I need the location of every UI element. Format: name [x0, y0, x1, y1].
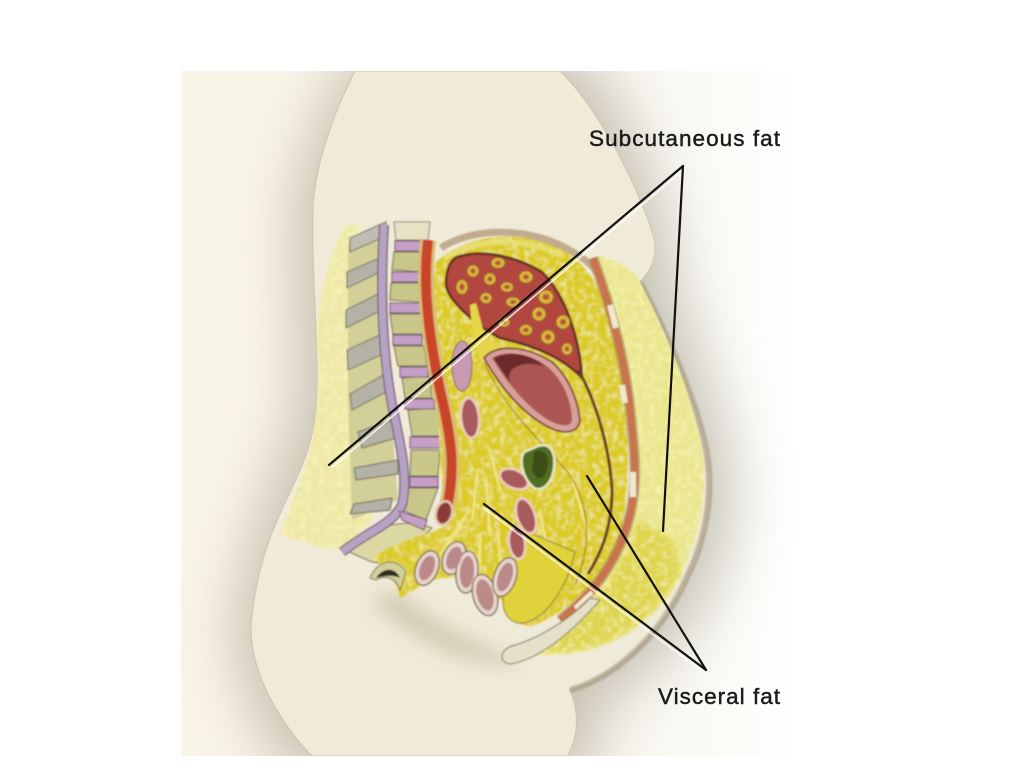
mesenteric vessels	[459, 397, 540, 560]
lower visceral lobe	[503, 530, 575, 623]
subcutaneous fat: front	[515, 255, 704, 655]
aorta	[426, 240, 455, 527]
label: subcutaneous fat: Subcutaneous fat	[589, 126, 781, 151]
subcutaneous fat: back	[280, 225, 372, 550]
spinal cord	[342, 225, 404, 552]
leader lines: subcutaneous fat	[329, 166, 684, 531]
intestine loops	[410, 538, 522, 618]
spinous processes	[346, 222, 398, 520]
abdominal wall muscle	[560, 258, 635, 620]
pancreas	[452, 341, 472, 391]
body silhouette	[251, 71, 711, 756]
rectum	[370, 562, 406, 590]
infographic: abdomen cross-section	[181, 71, 780, 756]
liver vessels	[456, 258, 572, 355]
anatomy cross-section	[280, 222, 704, 664]
mesentery strands	[440, 450, 590, 580]
peritoneal arch	[441, 232, 600, 275]
background wash	[181, 71, 770, 756]
peritoneum line	[484, 362, 612, 585]
fat strand at liver	[470, 303, 505, 360]
leader lines: visceral fat	[483, 476, 706, 674]
colon	[522, 445, 554, 489]
liver	[446, 254, 582, 378]
visceral fat	[372, 236, 628, 626]
label: visceral fat: Visceral fat	[658, 684, 781, 709]
stomach	[484, 348, 580, 432]
intervertebral discs	[390, 241, 440, 530]
lower abdominal tendon	[502, 598, 600, 664]
vertebrae	[345, 222, 440, 565]
